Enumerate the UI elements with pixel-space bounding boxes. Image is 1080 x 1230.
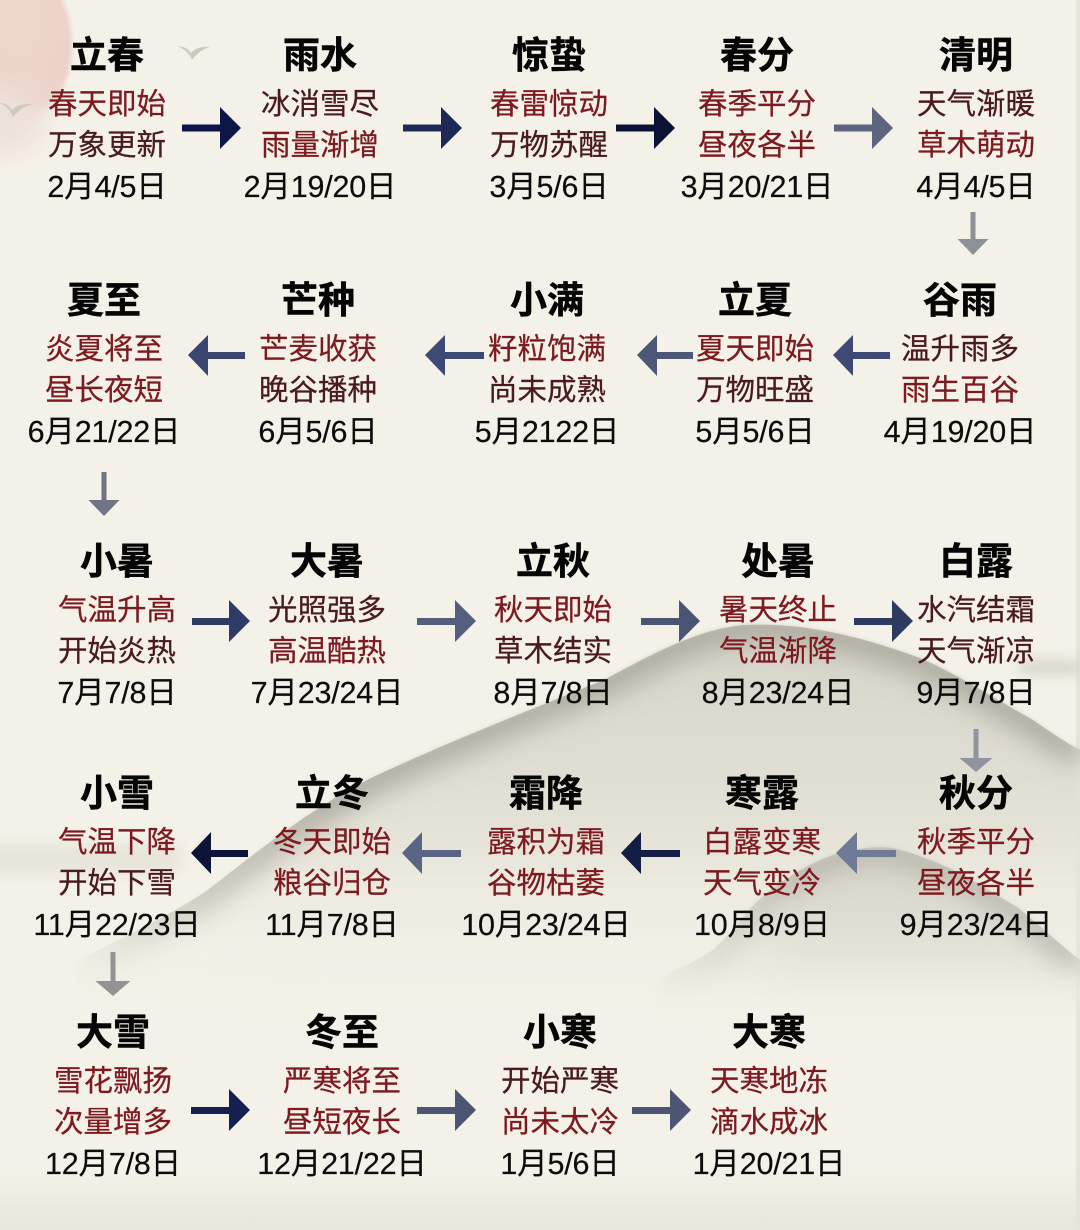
term: 霜降: 谷物枯萎 <box>487 867 605 900</box>
term: 寒露: 10月8/9日 <box>694 908 830 942</box>
term: 寒露 <box>694 773 830 942</box>
term: 谷雨: 4月19/20日 <box>884 415 1036 449</box>
term: 白露 <box>916 541 1036 710</box>
term: 立夏 <box>695 280 815 449</box>
term: 秋分: 秋分 <box>939 773 1013 814</box>
term: 夏至: 6月21/22日 <box>28 415 180 449</box>
row 2 terms <box>28 280 1036 449</box>
term: 小满: 小满 <box>510 280 584 321</box>
arrow: 秋分 to 寒露 <box>836 832 896 874</box>
term: 清明: 4月4/5日 <box>916 170 1036 204</box>
term: 白露: 9月7/8日 <box>916 676 1036 710</box>
term: 芒种: 6月5/6日 <box>258 415 378 449</box>
term: 冬至: 昼短夜长 <box>283 1106 401 1139</box>
term: 立秋: 草木结实 <box>494 635 612 668</box>
term: 冬至: 冬至 <box>305 1012 379 1053</box>
term: 白露: 天气渐凉 <box>917 635 1035 668</box>
row 1 terms <box>47 35 1036 204</box>
term: 立冬: 立冬 <box>295 773 369 814</box>
term: 秋分 <box>900 773 1052 942</box>
term: 夏至: 夏至 <box>67 280 141 321</box>
term: 芒种: 芒种 <box>281 280 355 321</box>
term: 小满 <box>475 280 619 449</box>
term: 小雪: 小雪 <box>80 773 154 814</box>
term: 小寒: 1月5/6日 <box>500 1147 620 1181</box>
term: 小暑: 气温升高 <box>58 594 176 627</box>
term: 小暑: 小暑 <box>80 541 154 582</box>
term: 大雪: 12月7/8日 <box>45 1147 181 1181</box>
arrow: 清明 down to 谷雨 <box>958 212 988 255</box>
term: 大寒 <box>693 1012 845 1181</box>
term: 立秋: 秋天即始 <box>494 594 612 627</box>
term: 寒露: 天气变冷 <box>703 867 821 900</box>
term: 惊蛰: 春雷惊动 <box>490 88 608 121</box>
term: 立秋: 立秋 <box>516 541 590 582</box>
term: 小寒: 开始严寒 <box>501 1065 619 1098</box>
arrow: 芒种 to 夏至 <box>188 335 245 376</box>
arrow: 夏至 down to 小暑 <box>88 472 120 516</box>
term: 立冬 <box>265 773 399 942</box>
term: 大寒: 1月20/21日 <box>693 1147 845 1181</box>
term: 秋分: 秋季平分 <box>917 826 1035 859</box>
arrow: 雨水 to 惊蛰 <box>403 107 462 149</box>
term: 小满: 5月2122日 <box>475 415 619 449</box>
term: 立秋: 8月7/8日 <box>493 676 613 710</box>
term: 小雪: 气温下降 <box>58 826 176 859</box>
term: 小暑: 开始炎热 <box>58 635 176 668</box>
term: 立夏: 夏天即始 <box>696 333 814 366</box>
term: 雨水: 冰消雪尽 <box>261 88 379 121</box>
term: 立春: 2月4/5日 <box>47 170 167 204</box>
term: 立冬: 11月7/8日 <box>265 908 399 942</box>
term: 雨水: 雨水 <box>283 35 357 76</box>
term: 立春: 万象更新 <box>48 129 166 162</box>
arrow: 寒露 to 霜降 <box>621 832 680 874</box>
term: 立春: 春天即始 <box>48 88 166 121</box>
term: 春分: 春分 <box>720 35 794 76</box>
term: 清明: 草木萌动 <box>917 129 1035 162</box>
term: 小雪: 开始下雪 <box>58 867 176 900</box>
row 4 terms <box>33 773 1052 942</box>
term: 处暑: 8月23/24日 <box>702 676 854 710</box>
arrow: 小寒 to 大寒 <box>632 1089 691 1131</box>
term: 小暑: 7月7/8日 <box>57 676 177 710</box>
term: 大寒: 天寒地冻 <box>710 1065 828 1098</box>
term: 谷雨: 雨生百谷 <box>901 374 1019 407</box>
term: 大暑: 大暑 <box>290 541 364 582</box>
arrow: 白露 down to 秋分 <box>960 729 992 772</box>
term: 冬至: 12月21/22日 <box>257 1147 427 1181</box>
term: 处暑: 处暑 <box>741 541 815 582</box>
term: 夏至: 炎夏将至 <box>45 333 163 366</box>
term: 霜降: 露积为霜 <box>487 826 605 859</box>
term: 惊蛰 <box>489 35 609 204</box>
arrow: 大雪 to 冬至 <box>191 1089 250 1131</box>
term: 小寒: 小寒 <box>523 1012 597 1053</box>
term: 大雪 <box>45 1012 181 1181</box>
term: 大雪: 雪花飘扬 <box>54 1065 172 1098</box>
term: 冬至: 严寒将至 <box>283 1065 401 1098</box>
term: 清明: 天气渐暖 <box>917 88 1035 121</box>
term: 立春: 立春 <box>70 35 144 76</box>
term: 芒种: 晚谷播种 <box>259 374 377 407</box>
term: 大暑: 光照强多 <box>268 594 386 627</box>
arrow: 小满 to 芒种 <box>425 335 484 376</box>
term: 白露: 水汽结霜 <box>917 594 1035 627</box>
term: 霜降: 10月23/24日 <box>461 908 631 942</box>
term: 立秋 <box>493 541 613 710</box>
arrow: 惊蛰 to 春分 <box>616 107 675 149</box>
term: 小满: 籽粒饱满 <box>488 333 606 366</box>
term: 小满: 尚未成熟 <box>488 374 606 407</box>
arrow: 立冬 to 小雪 <box>191 832 248 874</box>
term: 惊蛰: 惊蛰 <box>512 35 586 76</box>
term: 大雪: 次量增多 <box>54 1106 172 1139</box>
term: 霜降 <box>461 773 631 942</box>
term: 春分: 3月20/21日 <box>681 170 833 204</box>
term: 立夏: 立夏 <box>718 280 792 321</box>
term: 雨水: 雨量渐增 <box>261 129 379 162</box>
arrow: 春分 to 清明 <box>834 107 893 149</box>
term: 秋分: 9月23/24日 <box>900 908 1052 942</box>
arrow: 谷雨 to 立夏 <box>833 335 890 376</box>
term: 春分 <box>681 35 833 204</box>
arrow: 冬至 to 小寒 <box>417 1089 476 1131</box>
term: 大寒: 大寒 <box>732 1012 806 1053</box>
term: 夏至 <box>28 280 180 449</box>
term: 清明 <box>916 35 1036 204</box>
term: 谷雨: 温升雨多 <box>901 333 1019 366</box>
term: 大雪: 大雪 <box>76 1012 150 1053</box>
term: 立夏: 万物旺盛 <box>696 374 814 407</box>
arrow: 大暑 to 立秋 <box>417 600 476 642</box>
term: 小雪 <box>33 773 201 942</box>
term: 立春 <box>47 35 167 204</box>
term: 夏至: 昼长夜短 <box>45 374 163 407</box>
term: 惊蛰: 3月5/6日 <box>489 170 609 204</box>
term: 小暑 <box>57 541 177 710</box>
term: 小寒: 尚未太冷 <box>501 1106 619 1139</box>
term: 大暑: 高温酷热 <box>268 635 386 668</box>
term: 寒露: 白露变寒 <box>703 826 821 859</box>
term: 谷雨: 谷雨 <box>923 280 997 321</box>
arrow: 霜降 to 立冬 <box>402 832 461 874</box>
term: 大寒: 滴水成冰 <box>710 1106 828 1139</box>
arrow: 立秋 to 处暑 <box>641 600 700 642</box>
arrow: 处暑 to 白露 <box>854 600 913 642</box>
term: 处暑 <box>702 541 854 710</box>
term: 雨水 <box>244 35 396 204</box>
term: 秋分: 昼夜各半 <box>917 867 1035 900</box>
term: 芒种: 芒麦收获 <box>259 333 377 366</box>
term: 霜降: 霜降 <box>509 773 583 814</box>
arrow: 小雪 down to 大雪 <box>96 952 130 996</box>
arrow: 立夏 to 小满 <box>637 335 693 376</box>
term: 芒种 <box>258 280 378 449</box>
term: 寒露: 寒露 <box>725 773 799 814</box>
term: 大暑: 7月23/24日 <box>251 676 403 710</box>
icon: birds <box>0 46 210 117</box>
arrow: 立春 to 雨水 <box>182 107 241 149</box>
term: 冬至 <box>257 1012 427 1181</box>
term: 春分: 春季平分 <box>698 88 816 121</box>
term: 小寒 <box>500 1012 620 1181</box>
row 3 terms <box>57 541 1036 710</box>
term: 立夏: 5月5/6日 <box>695 415 815 449</box>
term: 清明: 清明 <box>939 35 1013 76</box>
arrow: 小暑 to 大暑 <box>192 600 250 642</box>
term: 立冬: 冬天即始 <box>273 826 391 859</box>
term: 雨水: 2月19/20日 <box>244 170 396 204</box>
term: 春分: 昼夜各半 <box>698 129 816 162</box>
term: 大暑 <box>251 541 403 710</box>
term: 谷雨 <box>884 280 1036 449</box>
term: 白露: 白露 <box>939 541 1013 582</box>
term: 小雪: 11月22/23日 <box>33 908 201 942</box>
term: 惊蛰: 万物苏醒 <box>490 129 608 162</box>
term: 处暑: 气温渐降 <box>719 635 837 668</box>
term: 处暑: 暑天终止 <box>719 594 837 627</box>
row 5 terms <box>45 1012 845 1181</box>
term: 立冬: 粮谷归仓 <box>273 867 391 900</box>
